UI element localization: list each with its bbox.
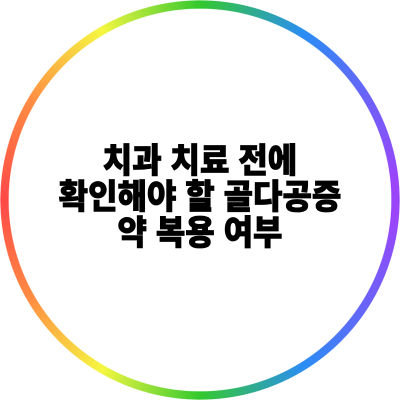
title: 치과 치료 전에 bbox=[103, 142, 297, 180]
title bbox=[58, 142, 341, 252]
title: 약 복용 여부 bbox=[118, 214, 282, 252]
title: 확인해야 할 골다공증 bbox=[59, 178, 341, 216]
